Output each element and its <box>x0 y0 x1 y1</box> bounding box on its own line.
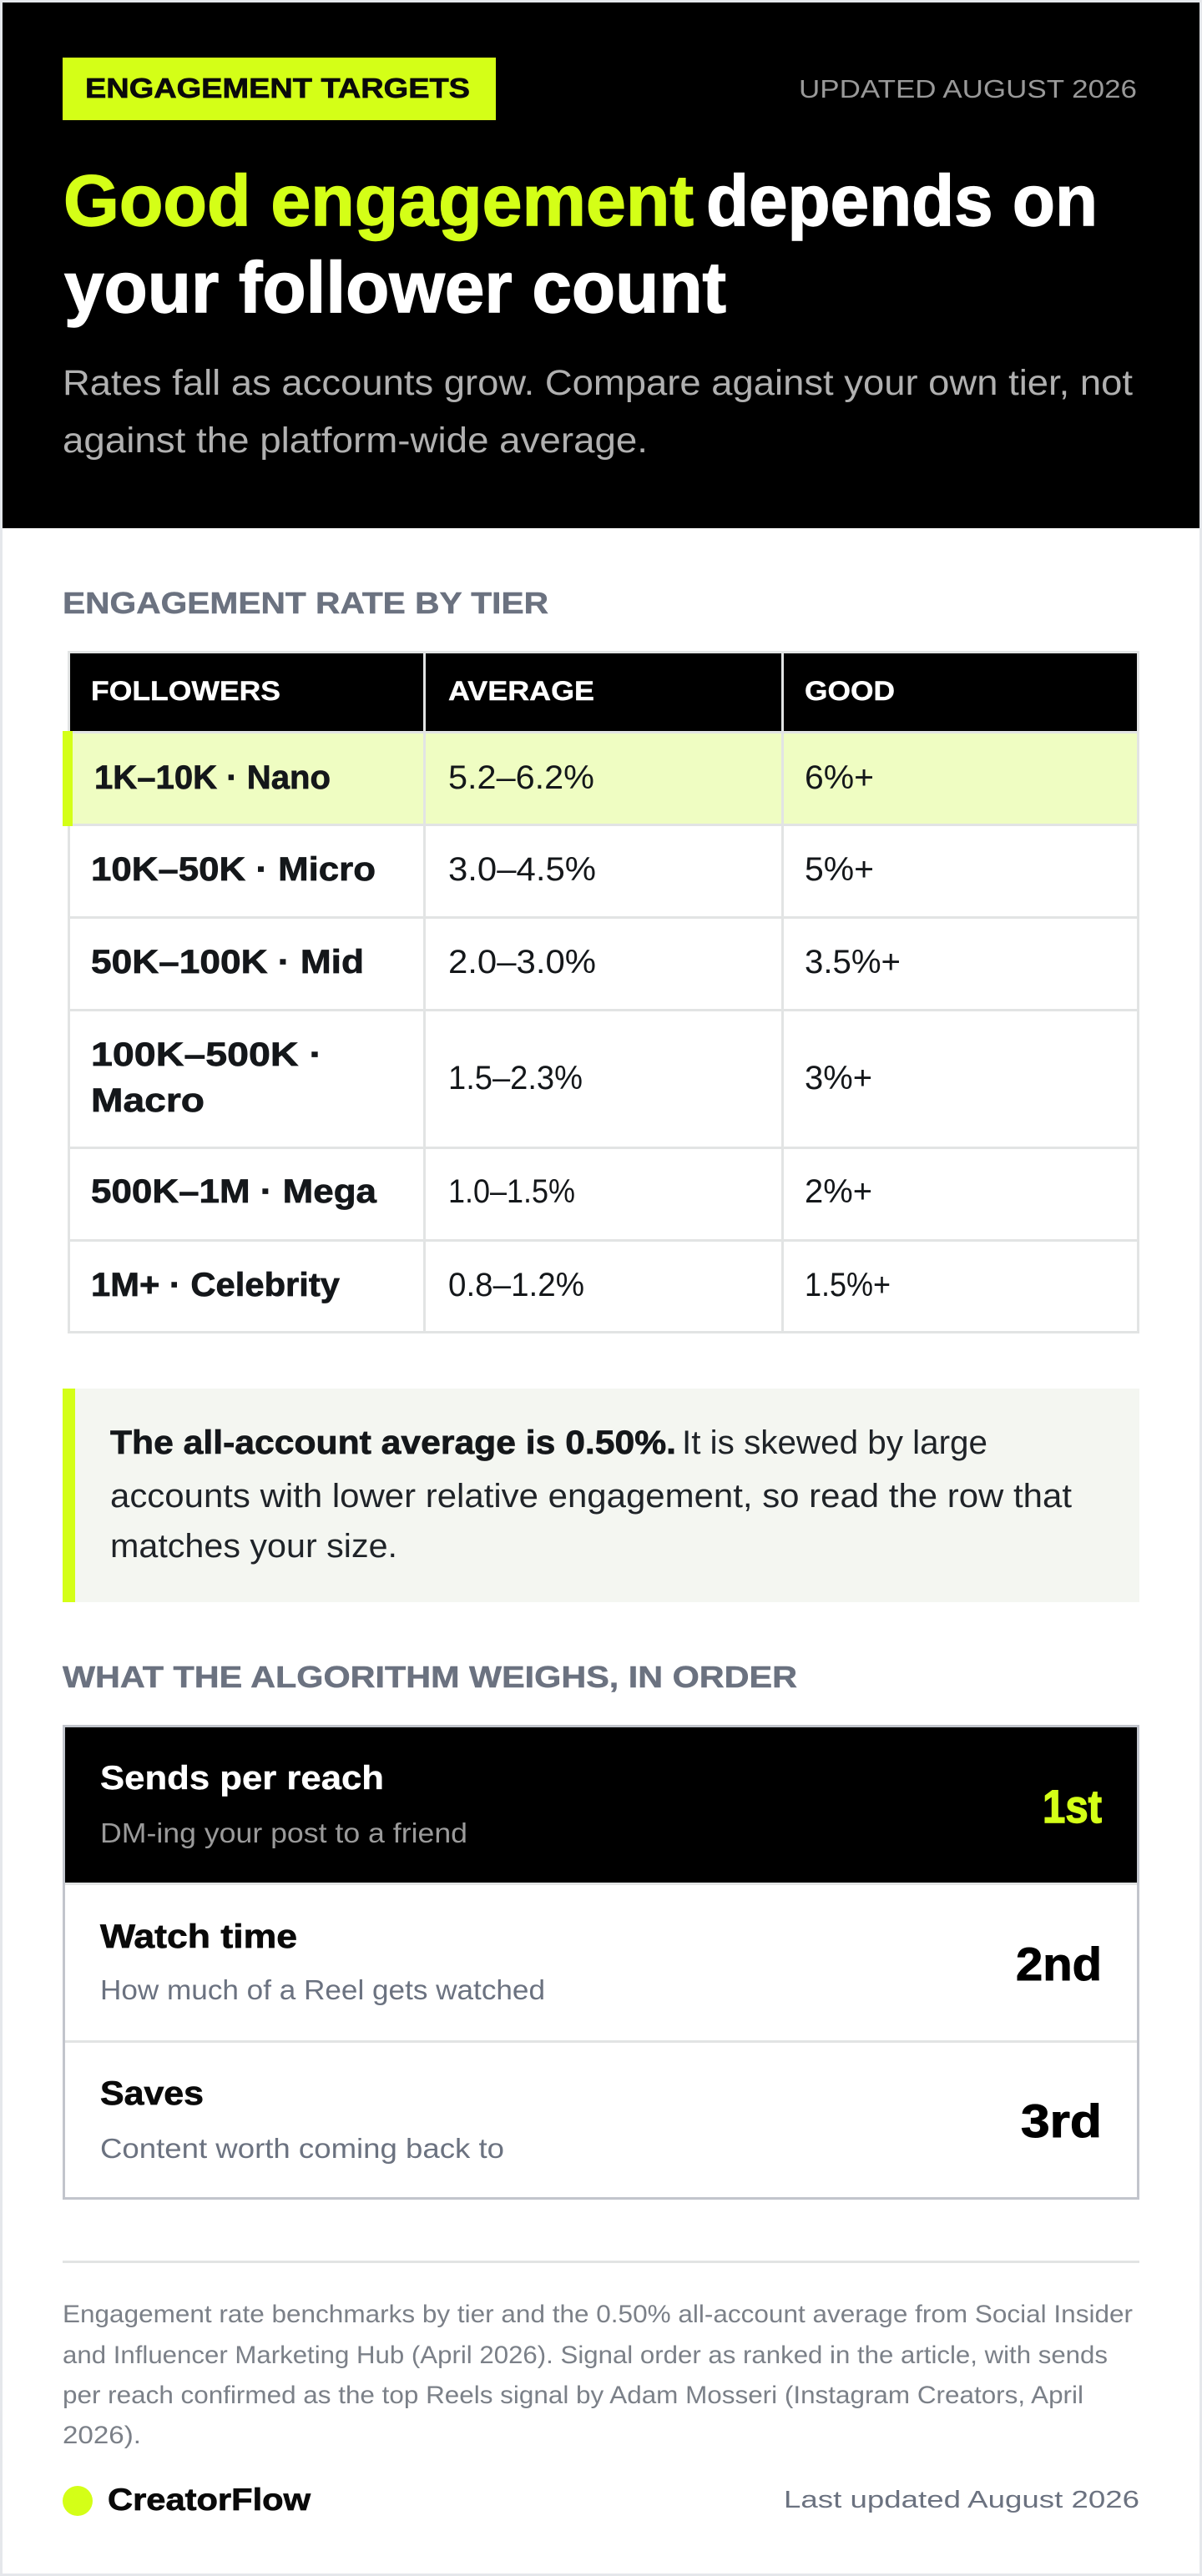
row: mega: 1.0–1.5% <box>448 1173 575 1210</box>
row: micro: 3.0–4.5% <box>448 851 596 888</box>
rank row: watch time: 2nd <box>1016 1938 1102 1990</box>
row: mid <box>91 944 901 980</box>
row: micro <box>91 851 874 888</box>
rank row: sends per reach: Sends per reach <box>100 1760 384 1797</box>
row: mega: 500K–1M · Mega <box>91 1173 377 1210</box>
badge: engagement targets <box>63 58 496 120</box>
table header row <box>70 653 1137 731</box>
subtitle: Rates fall as accounts grow. Compare against your own tier, not <box>63 363 1133 403</box>
callout: all-account average: accounts with lower relative engagement, so read the row that <box>110 1478 1072 1515</box>
row: macro <box>91 1036 872 1119</box>
heading: what the algorithm weighs: WHAT THE ALGORITHM WEIGHS, IN ORDER <box>63 1660 797 1694</box>
title: Good engagement <box>63 161 694 241</box>
row: celebrity <box>91 1267 891 1303</box>
rank row: watch time: How much of a Reel gets watched <box>100 1974 545 2005</box>
updated date: UPDATED AUGUST 2026 <box>799 74 1137 103</box>
row: macro: 3%+ <box>805 1060 872 1096</box>
row: micro: 5%+ <box>805 851 874 888</box>
table header row: AVERAGE <box>448 676 594 706</box>
row: macro: 1.5–2.3% <box>448 1060 583 1096</box>
source footnote: 2026). <box>63 2422 141 2449</box>
rank row: watch time <box>100 1918 1102 2005</box>
row: mega <box>91 1173 872 1210</box>
row: micro: 10K–50K · Micro <box>91 851 376 888</box>
callout: all-account average: It is skewed by large <box>682 1424 987 1461</box>
source footnote: Engagement rate benchmarks by tier and the 0.50% all-account average from Social Insider <box>63 2301 1133 2328</box>
rank row: saves: Content worth coming back to <box>100 2133 504 2164</box>
row: celebrity: 0.8–1.2% <box>448 1267 584 1303</box>
callout: all-account average <box>63 1389 1139 1602</box>
row: macro: Macro <box>91 1082 205 1119</box>
subtitle <box>63 363 1133 461</box>
row: celebrity: 1M+ · Celebrity <box>91 1267 341 1303</box>
rank row: sends per reach <box>65 1727 1137 1883</box>
row: macro: 100K–500K · <box>91 1036 322 1073</box>
panel: header <box>3 3 1199 528</box>
callout: all-account average: matches your size. <box>110 1528 397 1565</box>
rank row: sends per reach: 1st <box>1043 1780 1102 1832</box>
table header row: GOOD <box>805 676 895 706</box>
heading: engagement rate by tier: ENGAGEMENT RATE BY TIER <box>63 586 548 620</box>
source footnote <box>63 2301 1133 2449</box>
row: nano: 1K–10K · Nano <box>94 759 331 796</box>
callout: all-account average: The all-account average is 0.50%. <box>110 1424 676 1461</box>
panel: algorithm ranking <box>63 1725 1139 2200</box>
row: celebrity: 1.5%+ <box>805 1267 891 1303</box>
source footnote: per reach confirmed as the top Reels signal by Adam Mosseri (Instagram Creators, April <box>63 2382 1083 2409</box>
title: depends on <box>706 161 1098 241</box>
row: nano: 6%+ <box>805 759 874 796</box>
source footnote: and Influencer Marketing Hub (April 2026). Signal order as ranked in the article, with sends <box>63 2342 1108 2369</box>
row: mid: 2.0–3.0% <box>448 944 596 980</box>
rank row: saves: 3rd <box>1021 2095 1102 2147</box>
rank row: watch time: Watch time <box>100 1918 297 1955</box>
row: mid: 50K–100K · Mid <box>91 944 364 980</box>
table: engagement rate by tier <box>63 651 1139 1333</box>
row: nano: 5.2–6.2% <box>448 759 594 796</box>
last updated: Last updated August 2026 <box>784 2487 1139 2513</box>
rank row: saves <box>100 2075 1102 2164</box>
badge: engagement targets: ENGAGEMENT TARGETS <box>85 73 470 103</box>
brand logo: CreatorFlow: CreatorFlow <box>108 2483 311 2517</box>
row highlight accent <box>63 731 73 826</box>
table header row: FOLLOWERS <box>91 676 280 706</box>
rank row: sends per reach: DM-ing your post to a friend <box>100 1817 467 1848</box>
title <box>63 161 1098 328</box>
row: mid: 3.5%+ <box>805 944 901 980</box>
row: mega: 2%+ <box>805 1173 872 1210</box>
title: your follower count <box>64 248 726 328</box>
row: nano <box>94 759 874 796</box>
rank row: saves: Saves <box>100 2075 204 2112</box>
subtitle: against the platform-wide average. <box>63 421 648 461</box>
